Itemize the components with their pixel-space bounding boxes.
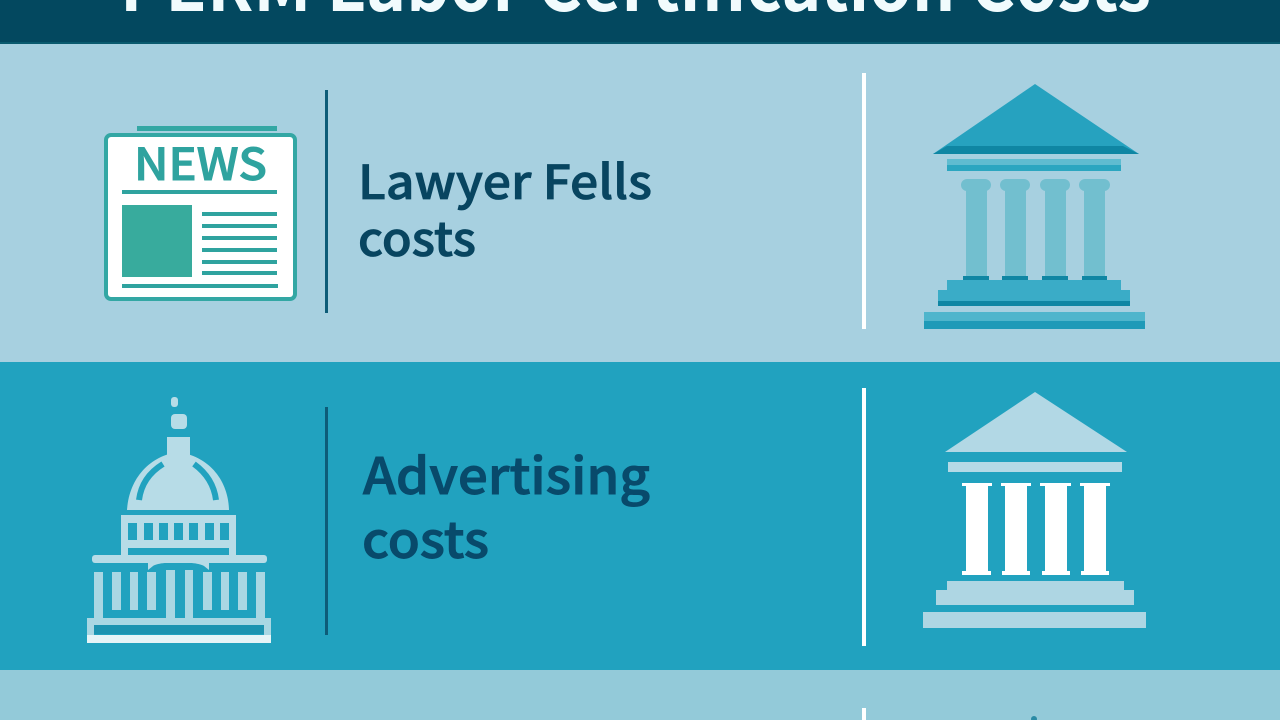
- icon: courthouse, white: [923, 392, 1146, 628]
- text: advertising costs: Advertising: [363, 437, 650, 509]
- panel: lawyer fees row: [0, 44, 1280, 362]
- panel: third row, cropped: [0, 670, 1280, 720]
- icon: newspaper: NEWS: [134, 129, 267, 193]
- icon: newspaper: [106, 126, 295, 299]
- text: lawyer fells costs: costs: [358, 201, 476, 270]
- title banner: [0, 0, 1280, 44]
- icon: courthouse, teal: [924, 84, 1145, 329]
- text: lawyer fells costs: Lawyer Fells: [358, 144, 652, 213]
- panel: advertising row: [0, 362, 1280, 670]
- icon: capitol building: [87, 397, 271, 643]
- text: lawyer fells costs: [358, 144, 652, 270]
- text: advertising costs: costs: [362, 501, 489, 573]
- text: advertising costs: [362, 437, 650, 573]
